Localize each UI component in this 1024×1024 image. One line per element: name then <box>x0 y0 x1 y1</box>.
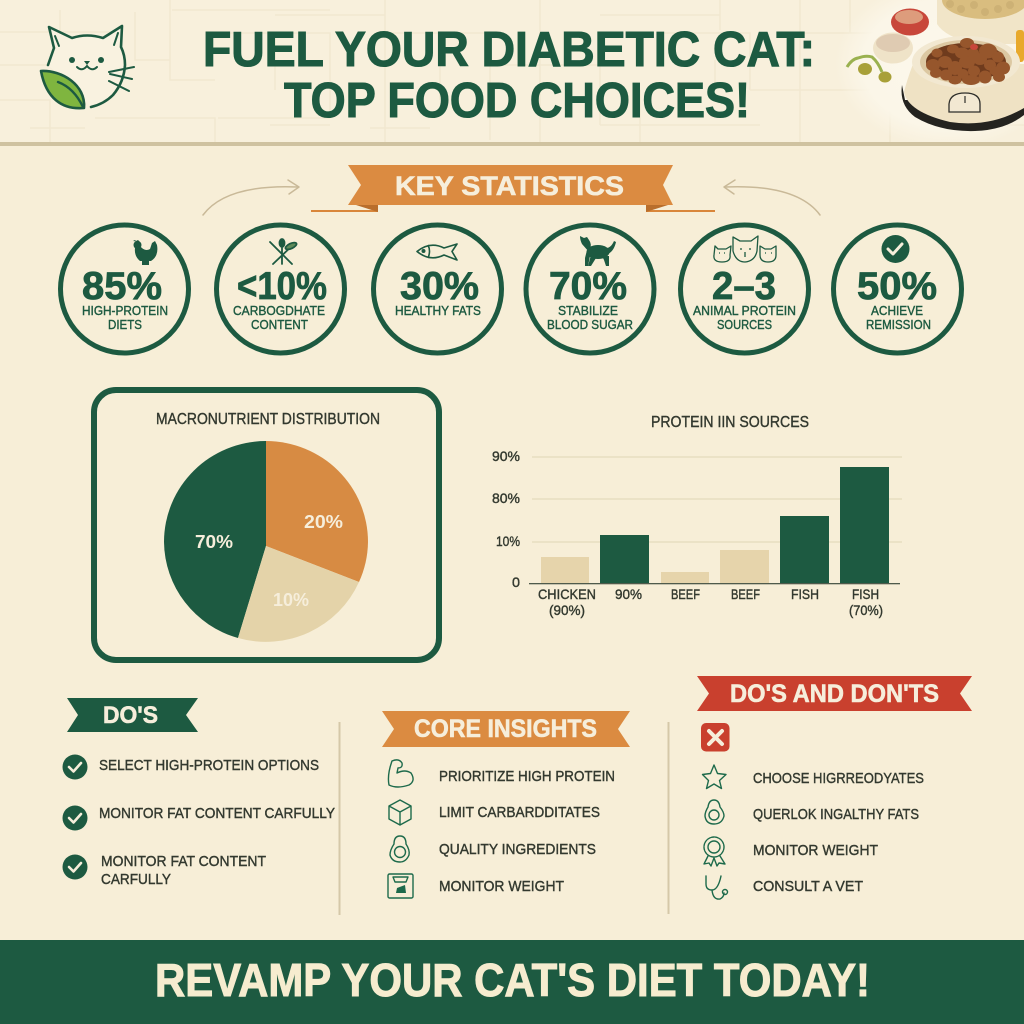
stat: 2-3 animal protein sources: ANIMAL PROTEIN <box>693 303 796 318</box>
section banner: key statistics <box>311 165 715 212</box>
logo: cat with leaf <box>41 26 134 108</box>
item: select high-protein options: SELECT HIGH-PROTEIN OPTIONS <box>99 757 319 774</box>
title <box>203 23 815 128</box>
stat: 2-3 animal protein sources: SOURCES <box>717 317 772 332</box>
icon: three cat faces <box>714 236 776 262</box>
item: choose <box>702 765 924 788</box>
item: monitor fat content, two lines: MONITOR FAT CONTENT <box>101 853 266 870</box>
item: monitor fat content: MONITOR FAT CONTENT CARFULLY <box>99 805 335 822</box>
item: overlook fats: QUERLOK INGALTHY FATS <box>753 806 919 823</box>
banner: do's and don'ts <box>697 676 972 711</box>
item: prioritize high protein: PRIORITIZE HIGH PROTEIN <box>439 768 615 785</box>
banner: core insights: CORE INSIGHTS <box>414 715 597 743</box>
chart heading: PROTEIN IIN SOURCES <box>651 414 809 431</box>
stat: 70% stabilize blood sugar: BLOOD SUGAR <box>547 317 633 332</box>
stat: under 10% carbohydrate content: CARBOGDHATE <box>233 303 325 318</box>
stat: 50% achieve remission: ACHIEVE <box>871 303 923 318</box>
item: consult a vet: CONSULT A VET <box>753 878 863 895</box>
item: monitor weight <box>388 874 564 898</box>
banner: do's and don'ts: DO'S AND DON'TS <box>730 680 939 708</box>
panel heading: MACRONUTRIENT DISTRIBUTION <box>156 411 380 428</box>
footer banner: REVAMP YOUR CAT'S DIET TODAY! <box>155 954 870 1006</box>
panel: core insights <box>382 711 630 898</box>
title: TOP FOOD CHOICES! <box>284 74 750 128</box>
x axis labels: BEEF <box>731 586 760 602</box>
pie chart: 20% <box>304 512 343 532</box>
stat: under 10% carbohydrate content: <10% <box>237 265 327 308</box>
stat: 70% stabilize blood sugar <box>526 225 654 353</box>
x axis labels: FISH <box>852 586 879 602</box>
item: choose: CHOOSE HIGRREODYATES <box>753 770 924 787</box>
y axis labels: 10% <box>496 533 520 549</box>
banner: do's: DO'S <box>103 702 158 729</box>
stat: 30% healthy fats: 30% <box>400 265 479 308</box>
icon: cat silhouette <box>580 236 616 266</box>
x axis labels: 90% <box>615 586 642 602</box>
stat: 30% healthy fats <box>374 225 502 353</box>
item: monitor weight <box>704 837 878 866</box>
stat: 85% high-protein diets: 85% <box>82 265 162 308</box>
y axis labels: 90% <box>492 448 520 464</box>
item: monitor weight: MONITOR WEIGHT <box>753 842 878 859</box>
bar chart: protein in sources <box>492 414 902 618</box>
item: quality ingredients: QUALITY INGREDIENTS <box>439 841 596 858</box>
x axis labels: (70%) <box>849 602 883 618</box>
icon: red cross <box>701 723 730 752</box>
section banner: key statistics: KEY STATISTICS <box>395 171 624 201</box>
item: prioritize high protein <box>388 760 615 787</box>
stat: 2-3 animal protein sources <box>680 225 808 353</box>
y axis labels: 0 <box>512 574 520 590</box>
panel: do's and don'ts <box>697 676 972 899</box>
stat: 30% healthy fats: HEALTHY FATS <box>395 303 481 318</box>
pie chart: 70% <box>195 532 233 552</box>
icon: fish <box>417 244 457 260</box>
panel: macronutrient distribution <box>94 390 439 660</box>
item: limit carbohydrates: LIMIT CARBARDDITATES <box>439 804 600 821</box>
stat: 70% stabilize blood sugar: 70% <box>549 265 627 308</box>
item: quality ingredients <box>390 836 596 862</box>
header divider <box>0 142 1024 146</box>
item: monitor fat content, two lines <box>62 853 266 888</box>
bars <box>541 467 889 583</box>
item: monitor weight: MONITOR WEIGHT <box>439 878 564 895</box>
footer banner <box>0 940 1024 1024</box>
stat: 50% achieve remission: REMISSION <box>866 317 931 332</box>
illustration: food bowls <box>847 0 1024 131</box>
arrow: right curved <box>724 180 820 215</box>
item: overlook fats <box>705 800 919 824</box>
panel: do's <box>62 698 335 888</box>
header background <box>0 0 1024 143</box>
item: monitor fat content, two lines: CARFULLY <box>101 871 171 888</box>
banner: core insights <box>382 711 630 747</box>
pie chart <box>164 441 368 642</box>
stat: under 10% carbohydrate content: CONTENT <box>251 317 308 332</box>
x axis labels <box>538 586 883 618</box>
icon: crossed-out grain <box>270 239 297 264</box>
stat: 70% stabilize blood sugar: STABILIZE <box>558 303 618 318</box>
x axis labels: BEEF <box>671 586 700 602</box>
arrow: left curved <box>203 180 299 215</box>
y axis labels: 80% <box>492 490 520 506</box>
stat: 85% high-protein diets: DIETS <box>108 317 142 332</box>
x axis labels: FISH <box>791 586 819 602</box>
stat: under 10% carbohydrate content <box>216 225 344 353</box>
item: limit carbohydrates <box>389 800 600 825</box>
item: consult a vet <box>706 876 863 899</box>
x axis labels: (90%) <box>549 602 585 618</box>
pie chart: 10% <box>273 590 309 610</box>
icon: check badge <box>882 235 910 263</box>
stat: 85% high-protein diets <box>60 225 188 353</box>
icon: chicken <box>133 240 157 265</box>
title: FUEL YOUR DIABETIC CAT: <box>203 23 815 77</box>
item: monitor fat content <box>62 805 335 830</box>
stat: 2-3 animal protein sources: 2–3 <box>712 265 776 308</box>
stat: 50% achieve remission: 50% <box>857 265 937 308</box>
y axis labels <box>492 448 520 590</box>
x axis labels: CHICKEN <box>538 586 596 602</box>
banner: do's <box>67 698 198 732</box>
stat: 50% achieve remission <box>834 225 962 353</box>
stat: 85% high-protein diets: HIGH-PROTEIN <box>82 303 168 318</box>
item: select high-protein options <box>62 754 319 780</box>
